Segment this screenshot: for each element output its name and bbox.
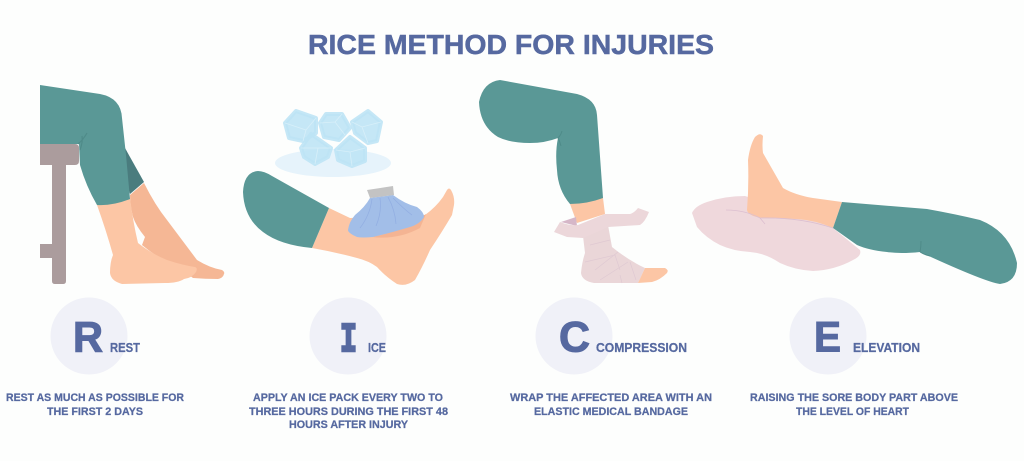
description: THREE HOURS DURING THE FIRST 48: [249, 406, 448, 418]
shin and foot: [312, 188, 454, 285]
ice cubes: [285, 111, 381, 166]
toes: [638, 268, 668, 283]
knee crease: [920, 241, 930, 256]
description: THE LEVEL OF HEART: [796, 406, 909, 418]
letter C: C: [559, 314, 590, 362]
description: [750, 392, 958, 418]
letter circle: [310, 298, 386, 374]
bandage lines: [585, 240, 636, 283]
ice pack cap: [367, 186, 394, 198]
chair: [40, 144, 79, 284]
skin above bandage: [570, 198, 605, 223]
trouser: [243, 171, 329, 248]
letter circle: [50, 298, 128, 374]
ice shadow ellipse: [275, 149, 391, 177]
section: ice: [249, 298, 448, 431]
section: compression: [510, 298, 712, 418]
description: [249, 392, 448, 431]
description: RAISING THE SORE BODY PART ABOVE: [750, 392, 958, 404]
trouser: [833, 202, 1017, 284]
description: APPLY AN ICE PACK EVERY TWO TO: [253, 392, 443, 404]
illustration: elevation: [692, 134, 1017, 284]
ice cube highlights: [285, 114, 381, 166]
description: [6, 392, 184, 418]
description: [510, 392, 712, 418]
illustration: compression: [479, 80, 668, 283]
back foot: [130, 183, 224, 279]
ice pack folds: [360, 197, 412, 228]
label: ICE: [368, 340, 386, 355]
knee crease: [78, 133, 87, 150]
label: COMPRESSION: [596, 340, 687, 355]
letter circle: [790, 298, 866, 374]
description: HOURS AFTER INJURY: [289, 419, 409, 431]
front foot: [97, 198, 197, 284]
knee crease: [558, 131, 562, 146]
back leg trouser: [122, 148, 144, 194]
section: rest: [6, 298, 184, 418]
illustration: rest, seated legs: [40, 85, 224, 284]
description: REST AS MUCH AS POSSIBLE FOR: [6, 392, 184, 404]
foot shadow under pack: [372, 214, 426, 238]
letter E: E: [814, 314, 841, 362]
pillow crease: [726, 210, 833, 228]
description: THE FIRST 2 DAYS: [47, 406, 143, 418]
title: RICE METHOD FOR INJURIES: [308, 29, 714, 60]
trouser: [479, 80, 603, 204]
inner bandage: [561, 217, 577, 226]
letter I: I: [340, 318, 357, 364]
foot: [747, 134, 842, 228]
letter R: R: [73, 314, 103, 362]
front leg trouser: [40, 85, 130, 205]
loose bandage strip: [554, 208, 649, 238]
ice pack: [348, 195, 424, 238]
label: REST: [110, 340, 140, 355]
pillow: [692, 196, 860, 271]
illustration: ice: [243, 111, 454, 285]
section: elevation: [750, 298, 958, 418]
label: ELEVATION: [853, 340, 920, 355]
description: ELASTIC MEDICAL BANDAGE: [534, 406, 688, 418]
bandaged foot: [581, 225, 645, 283]
letter circle: [536, 298, 612, 374]
description: WRAP THE AFFECTED AREA WITH AN: [510, 392, 712, 404]
